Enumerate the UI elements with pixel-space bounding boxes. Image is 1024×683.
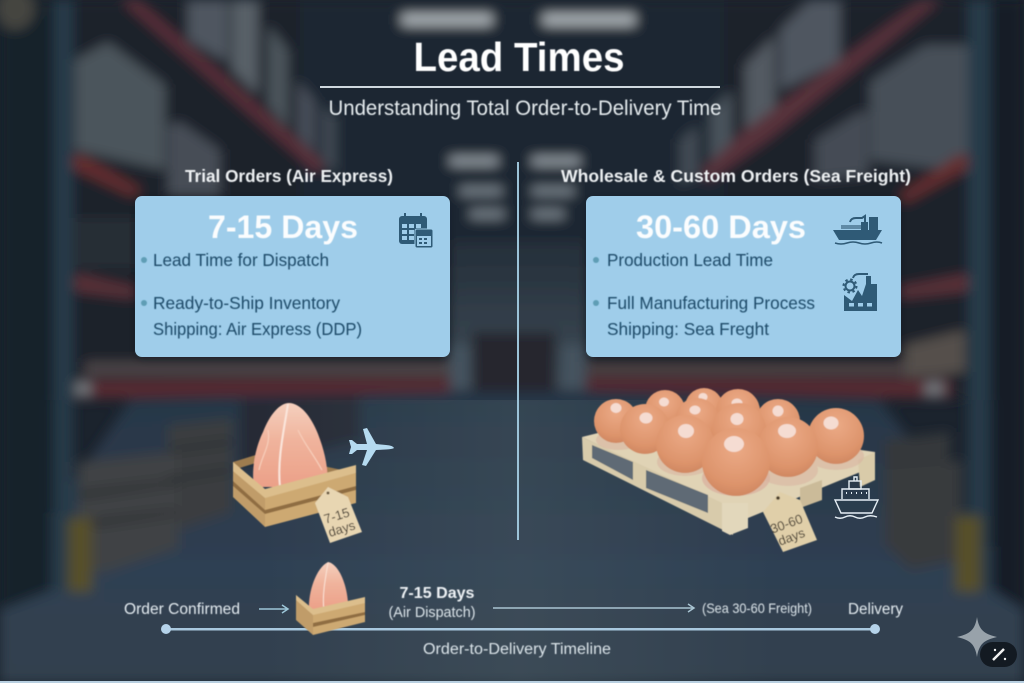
icon: factory [844, 274, 877, 311]
icon: calendars [399, 213, 433, 248]
start dot [161, 624, 171, 634]
right floor goods [885, 460, 962, 570]
card background [586, 196, 901, 357]
title underline [320, 86, 720, 88]
price tag: days [326, 517, 357, 540]
label: sea freight: (Sea 30-60 Freight) [702, 600, 812, 616]
right beams [700, 0, 940, 182]
arrow: to crate [259, 605, 288, 613]
icon: airplane [349, 428, 394, 466]
panel: wholesale orders [561, 166, 911, 359]
price tag [315, 487, 362, 543]
heading: wholesale orders: Wholesale & Custom Orders (Sea Freight) [561, 166, 911, 186]
bullet list: Full Manufacturing Process [607, 293, 815, 313]
crate front [233, 462, 265, 527]
crate back [233, 453, 356, 481]
card shadow [137, 200, 448, 359]
timeline caption: Order-to-Delivery Timeline [423, 641, 611, 658]
title: Lead Times [414, 34, 624, 80]
lead time figure: 30-60 Days [636, 209, 806, 245]
back of aisle [472, 332, 556, 392]
timeline line [166, 628, 875, 630]
subtitle: Understanding Total Order-to-Delivery Time [328, 97, 722, 120]
left upright [54, 0, 73, 590]
right lower shelf goods [586, 362, 946, 376]
left lower shelf goods [85, 362, 450, 376]
label: delivery: Delivery [848, 601, 903, 618]
label: air dispatch [388, 585, 476, 621]
spheres [594, 388, 864, 496]
price tag: days [776, 525, 807, 549]
left floor pallets [168, 418, 232, 530]
bullet list: Shipping: Sea Freght [607, 319, 769, 339]
heading: trial orders: Trial Orders (Air Express) [185, 166, 393, 186]
bullet list: Shipping: Air Express (DDP) [153, 319, 362, 339]
price tag: 30-60 [768, 511, 805, 537]
bullet list: Production Lead Time [607, 250, 773, 270]
label: order confirmed: Order Confirmed [124, 601, 240, 618]
label: air dispatch: (Air Dispatch) [388, 605, 476, 621]
floor glow [400, 400, 639, 681]
price tag: 7-15 [322, 505, 351, 527]
timeline [124, 562, 903, 658]
ceiling lights [402, 14, 492, 25]
icon: small crate with salt lump [296, 562, 365, 635]
right upright [968, 0, 990, 590]
illustration: salt lamp in crate [233, 403, 362, 543]
icon: ship outline [835, 477, 878, 518]
card background [135, 196, 450, 357]
bullet list [141, 250, 362, 339]
card shadow [588, 200, 899, 359]
lead time figure: 7-15 Days [208, 209, 358, 245]
bullet list: Lead Time for Dispatch [153, 250, 329, 270]
left beams [122, 0, 325, 172]
icon: sparkle watermark [957, 617, 997, 657]
bullet list: Ready-to-Ship Inventory [153, 293, 340, 313]
salt lump [253, 403, 328, 487]
bullet list [593, 250, 815, 339]
end dot [870, 624, 880, 634]
icon: cargo ship [833, 216, 882, 244]
left boxes, top [75, 42, 165, 170]
center divider [517, 162, 519, 540]
right boxes, top [870, 45, 968, 172]
arrow: to delivery [493, 604, 694, 612]
pallet [582, 420, 875, 535]
illustration: pallet of salt spheres [582, 388, 875, 552]
icon: wand badge [980, 642, 1017, 667]
panel: trial orders [135, 166, 450, 359]
label: air dispatch: 7-15 Days [400, 585, 474, 602]
price tag [763, 492, 817, 552]
